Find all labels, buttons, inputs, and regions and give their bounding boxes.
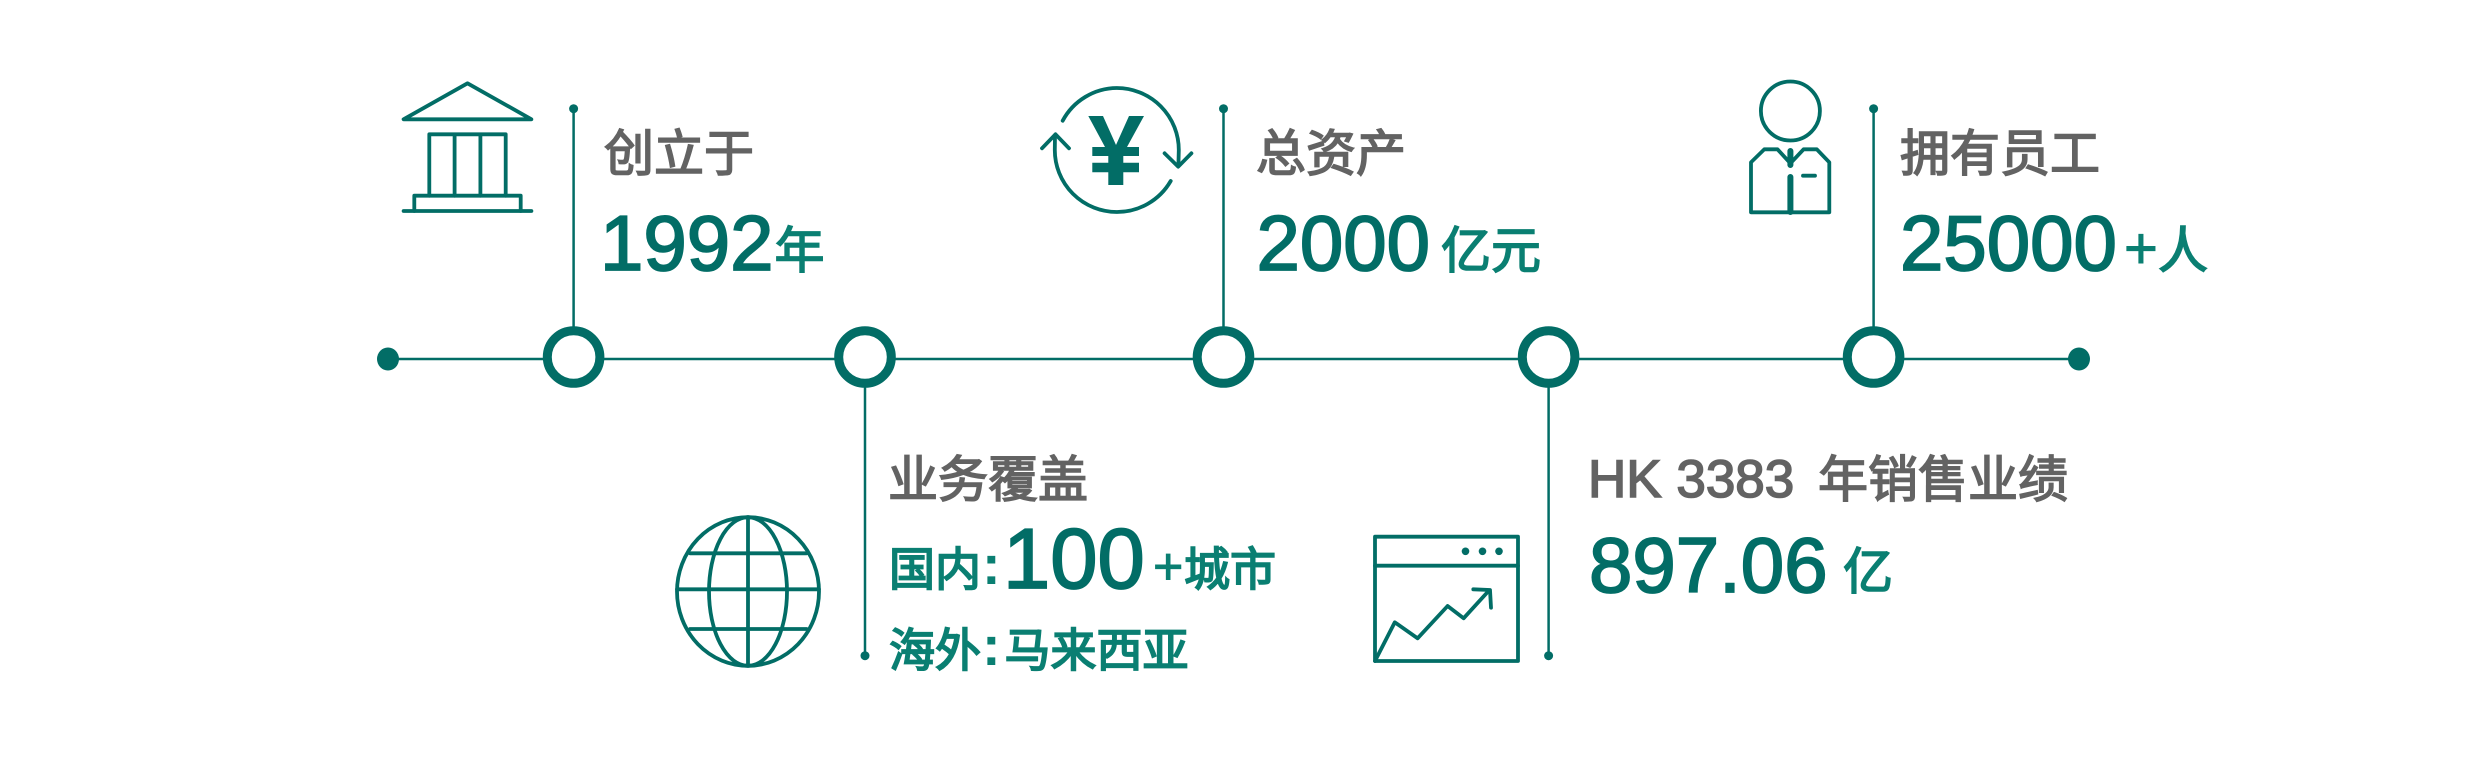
number: 1992: 1992 — [600, 199, 774, 287]
icon: globe — [677, 517, 819, 666]
connector: sales — [1544, 384, 1553, 660]
timeline node 5 — [1847, 331, 1900, 383]
label: overseas: 海外 — [889, 624, 981, 676]
colon: domestic: : — [982, 533, 1001, 596]
heading: founded: 创立于 — [604, 126, 754, 182]
text: annual sales — [1588, 450, 2068, 609]
number: 897.06: 897.06 — [1589, 521, 1828, 609]
icon: yen with cycle arrows — [1042, 88, 1191, 212]
unit: people: 人 — [2158, 223, 2208, 279]
icon: sales chart window — [1375, 537, 1518, 661]
number: 100: 100 — [1003, 512, 1145, 607]
heading: staff: 拥有员工 — [1900, 126, 2100, 182]
heading: annual sales: 年销售业绩 — [1818, 452, 2068, 508]
number: 2000: 2000 — [1256, 199, 1430, 287]
unit: 100 million yuan: 亿元 — [1441, 223, 1541, 279]
unit: year: 年 — [774, 223, 824, 279]
icon: employee — [1751, 82, 1829, 212]
timeline node 1 — [547, 331, 600, 383]
connector: coverage — [860, 384, 870, 660]
text: business coverage — [888, 452, 1276, 677]
text: Malaysia: 马来西亚 — [1004, 624, 1188, 676]
connector: assets — [1219, 104, 1228, 330]
text: founded — [600, 126, 824, 287]
heading: total assets: 总资产 — [1256, 126, 1406, 182]
connector: founded — [569, 104, 578, 330]
heading: annual sales: HK 3383 — [1588, 450, 1794, 509]
unit: plus: + — [1153, 538, 1183, 596]
number: 25000: 25000 — [1900, 199, 2117, 287]
icon: bank building — [404, 83, 531, 211]
heading: business coverage: 业务覆盖 — [888, 452, 1088, 508]
colon: overseas: : — [982, 614, 1001, 677]
label: domestic: 国内 — [889, 544, 981, 596]
connector: staff — [1869, 104, 1878, 330]
timeline node 3 — [1197, 331, 1250, 383]
unit: 100 million: 亿 — [1843, 544, 1893, 600]
unit: cities: 城市 — [1184, 544, 1276, 596]
text: staff — [1900, 126, 2208, 287]
unit: plus: + — [2124, 216, 2158, 281]
timeline node 2 — [839, 331, 891, 383]
text: total assets — [1256, 126, 1541, 287]
timeline node 4 — [1522, 331, 1575, 383]
timeline axis — [377, 348, 2090, 370]
